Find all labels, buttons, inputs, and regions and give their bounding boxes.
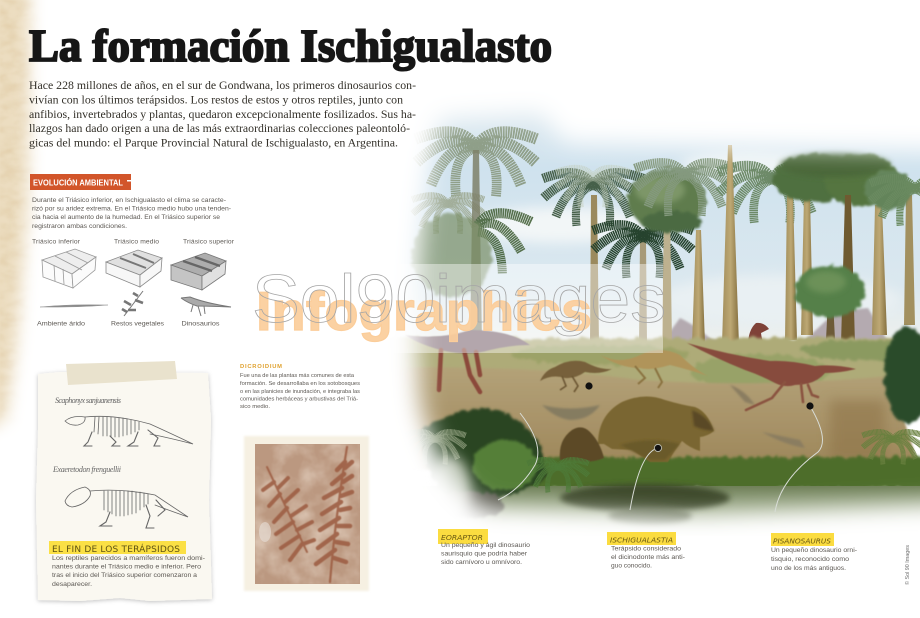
caption: eoraptor: sido carnívoro u omnívoro. (441, 559, 522, 566)
description: formación. Se desarrollaba en los sotobosques (240, 381, 360, 387)
environment labels: Dinosaurios (182, 320, 220, 328)
title: La formación Ischigualasto (29, 20, 552, 71)
sandy ground (402, 368, 916, 465)
caption: pisanosaurus: tisquio, reconocido como (771, 556, 849, 563)
foreground pale mist (430, 456, 470, 520)
period labels: Triásico superior (183, 238, 235, 246)
caption: ischigualastia (607, 532, 685, 570)
watermark panel: Infographics (256, 280, 592, 342)
description: tras el inicio del Triásico superior comenzaron a (52, 572, 197, 579)
left foreground plants (404, 409, 589, 519)
intro text: gicas del mundo: el Parque Provincial Natural de Ischigualasto, en Argentina. (29, 136, 398, 150)
intro text: anfibios, invertebrados y plantas, quedaron excepcionalmente fosilizados. Sus ha- (29, 108, 416, 121)
caption: pisanosaurus: PISANOSAURUS (773, 538, 832, 546)
skeleton: exaeretodon (65, 487, 188, 528)
fossil: dinosaur (181, 297, 231, 316)
pisanosaurus (687, 343, 856, 410)
section heading: EVOLUCIÓN AMBIENTAL (33, 176, 123, 188)
block diagram: dinosaurs (171, 253, 226, 290)
description: Durante el Triásico inferior, en Ischigualasto el clima se caracte- (32, 197, 226, 204)
block diagram: plant remains (106, 250, 162, 287)
description: sico medio. (240, 404, 270, 410)
caption: eoraptor: EORAPTOR (441, 534, 483, 542)
environment labels (37, 320, 220, 328)
description: o en las planicies de inundación, e integraba las (240, 389, 360, 395)
ischigualastia adult and calf (560, 396, 714, 462)
left palms (412, 115, 537, 345)
caption: eoraptor (438, 529, 530, 566)
palm (542, 158, 644, 345)
background red dinosaur (748, 322, 769, 340)
green tree (628, 170, 706, 345)
eoraptor (540, 361, 612, 392)
parchment strip (0, 0, 40, 432)
block diagram: arid (42, 249, 96, 288)
environment labels: Ambiente árido (37, 320, 85, 328)
section heading (30, 174, 131, 190)
water (482, 482, 920, 529)
caption: ischigualastia: el dicinodonte más anti- (611, 554, 685, 561)
illustration: Triassic landscape (400, 106, 920, 529)
panel: dicroidium (240, 364, 369, 591)
panel: el fin de los terápsidos (36, 361, 212, 601)
intro text: llazgos han dado origen a una de las más extraordinarias colecciones paleontoló- (29, 122, 410, 135)
distant hills (672, 307, 886, 342)
fossil: arid sediment (40, 305, 108, 307)
description (52, 555, 205, 588)
intro text: vivían con los últimos terápsidos. Los restos de estos y otros reptiles, junto con (29, 94, 403, 106)
description: rizó por su aridez extrema. En el Triásico medio hubo una tenden- (32, 206, 231, 212)
fossil: plant (122, 291, 143, 316)
intro text (29, 79, 416, 150)
description: Fue una de las plantas más comunes de esta (240, 373, 354, 379)
dark palm (592, 211, 694, 345)
ground shadows (542, 385, 885, 460)
caption: ischigualastia: ISCHIGUALASTIA (610, 536, 673, 544)
fern fronds (263, 447, 352, 582)
period labels: Triásico medio (114, 238, 159, 246)
highlighted heading: EL FIN DE LOS TERÁPSIDOS (52, 543, 180, 555)
intro text: Hace 228 millones de años, en el sur de Gondwana, los primeros dinosaurios con- (29, 79, 416, 92)
yellow dinosaur (600, 350, 708, 388)
watermark panel: Sol90images (252, 261, 666, 337)
skeleton: scaphonyx (65, 416, 193, 446)
period labels (32, 238, 235, 246)
heading: DICROIDIUM (240, 364, 282, 370)
large grey dinosaur (405, 330, 530, 392)
trunks and crowns (634, 145, 920, 345)
sky (409, 106, 920, 339)
caption: pisanosaurus: Un pequeño dinosaurio orni- (771, 547, 857, 554)
species name: Exaeretodon frenguellii (52, 465, 121, 474)
caption: pisanosaurus (771, 533, 857, 572)
description: comunidades herbáceas y arbustivas del Triá- (240, 396, 358, 402)
fossil photo (255, 444, 360, 584)
description: registraron ambas condiciones. (32, 223, 127, 230)
paper note (36, 372, 212, 601)
tape (66, 361, 177, 385)
caption: eoraptor: saurisquio que podría haber (441, 550, 528, 558)
species name: Scaphonyx sanjuanensis (55, 396, 121, 405)
right foliage (862, 327, 920, 465)
description (240, 373, 360, 410)
foreground grass band (510, 457, 920, 489)
panel: evolución ambiental (30, 174, 235, 328)
caption: pisanosaurus: uno de los más antiguos. (771, 565, 846, 572)
caption: ischigualastia: Terápsido considerado (611, 546, 681, 552)
description (32, 197, 231, 230)
caption: ischigualastia: guo conocido. (611, 562, 652, 570)
description: Los reptiles parecidos a mamíferos fueron domi- (52, 555, 205, 562)
highlighted heading (49, 541, 186, 555)
description: desaparecer. (52, 581, 92, 588)
period labels: Triásico inferior (32, 238, 81, 246)
description: nantes durante el Triásico medio e inferior. Pero (52, 564, 201, 570)
leader lines and markers (498, 382, 822, 512)
environment labels: Restos vegetales (111, 320, 165, 328)
caption: eoraptor: Un pequeño y ágil dinosaurio (441, 542, 530, 549)
description: cia hacia el aumento de la humedad. En el Triásico superior se (32, 214, 220, 221)
small tree (795, 265, 865, 340)
fossil photo frame (244, 436, 369, 591)
image credit: © Sol 90 Images (904, 544, 911, 585)
midground vegetation (400, 334, 894, 385)
